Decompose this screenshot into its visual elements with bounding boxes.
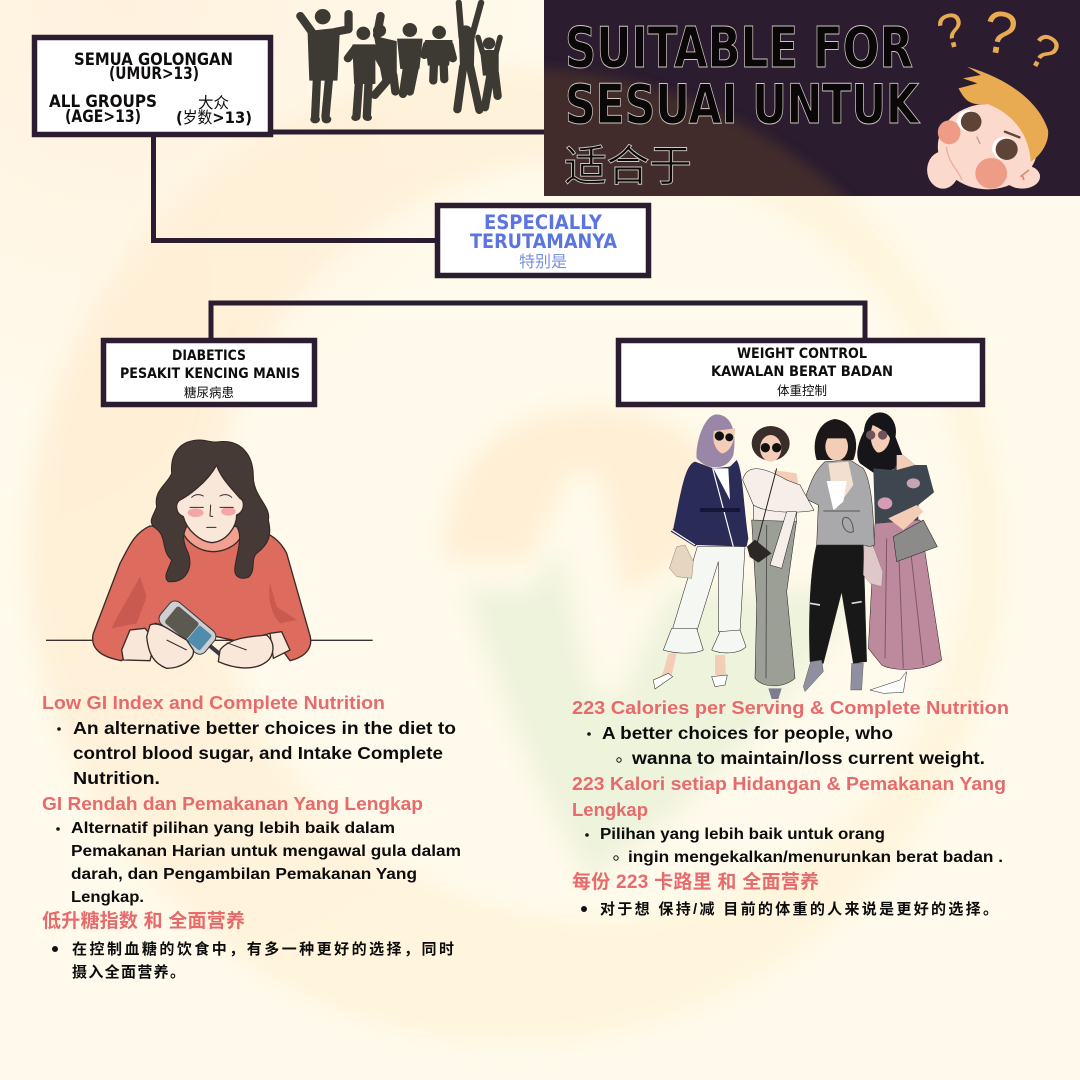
bullet: english: control blood sugar, and Intake Complete	[73, 743, 443, 763]
label: pesakit kencing manis: PESAKIT KENCING MANIS	[120, 366, 300, 382]
heading: chinese low gi: 低升糖指数 和 全面营养	[42, 909, 245, 932]
title: suitable for: SUITABLE FOR	[565, 16, 913, 81]
label: terutamanya: TERUTAMANYA	[470, 230, 617, 253]
figure: woman in hijab	[653, 414, 748, 689]
heading: kalori: 223 Kalori setiap Hidangan & Pemakanan Yang	[572, 774, 1006, 794]
bullet: chinese: 摄入全面营养。	[72, 963, 185, 981]
figure: woman in skirt	[857, 412, 942, 693]
label: chinese diabetics: 糖尿病患	[184, 385, 234, 400]
bullet: chinese: 对于想 保持/减 目前的体重的人来说是更好的选择。	[600, 900, 998, 918]
bullet: english: wanna to maintain/loss current weight.	[631, 748, 985, 768]
panel: especially box	[438, 206, 648, 276]
icon: confused pig face	[927, 67, 1048, 189]
text block: diabetic benefits	[42, 693, 461, 981]
illustration: four women	[653, 412, 942, 699]
bullet: malay: Pemakanan Harian untuk mengawal gula dalam	[71, 843, 461, 860]
icon: jumping people silhouettes	[300, 3, 500, 123]
bullet: chinese: 在控制血糖的饮食中，有多一种更好的选择，同时	[72, 940, 454, 958]
label: umur: (UMUR>13)	[109, 64, 199, 83]
label: chinese weight control: 体重控制	[777, 383, 827, 398]
heading: chinese calories: 每份 223 卡路里 和 全面营养	[572, 870, 819, 893]
label: chinese age: (岁数>13)	[176, 108, 252, 127]
bullet: malay: darah, dan Pengambilan Pemakanan Yang	[71, 866, 417, 883]
label: chinese general public: 大众	[198, 94, 229, 112]
label: chinese especially: 特别是	[519, 253, 567, 271]
bullet: english: Nutrition.	[73, 768, 160, 788]
heading: gi rendah: GI Rendah dan Pemakanan Yang Lengkap	[42, 794, 423, 814]
icon: question marks	[932, 0, 1068, 82]
label: diabetics: DIABETICS	[172, 348, 246, 364]
bullet: english: An alternative better choices in the diet to	[73, 718, 456, 738]
figure: woman in grey cardigan	[803, 419, 883, 692]
bullet: english	[57, 718, 456, 788]
panel: title banner	[544, 0, 1080, 196]
bullet: malay: ingin mengekalkan/menurunkan berat badan .	[628, 849, 1003, 866]
bullet: chinese	[52, 940, 454, 981]
illustration: woman checking blood sugar	[46, 440, 373, 668]
label: age: (AGE>13)	[65, 107, 141, 126]
connector lines	[154, 132, 865, 338]
heading: calories: 223 Calories per Serving & Complete Nutrition	[572, 698, 1009, 718]
label: especially: ESPECIALLY	[484, 211, 603, 234]
title: chinese: 适合于	[564, 143, 692, 191]
panel: diabetics box	[104, 340, 314, 404]
icon: question marks: ?	[1019, 22, 1068, 82]
panel: weight control box	[618, 340, 982, 404]
panel: all groups box	[34, 38, 270, 134]
bullet: english: A better choices for people, who	[602, 723, 893, 743]
title: sesuai untuk: SESUAI UNTUK	[565, 73, 921, 136]
bullet: malay: Pilihan yang lebih baik untuk orang	[600, 826, 885, 843]
heading: lengkap: Lengkap	[572, 800, 648, 820]
bullet: malay	[585, 826, 1003, 866]
label: kawalan berat badan: KAWALAN BERAT BADAN	[711, 364, 893, 380]
text block: weight control benefits	[572, 698, 1009, 918]
bullet: english	[587, 723, 985, 768]
bullet: malay	[56, 820, 461, 906]
label: semua golongan: SEMUA GOLONGAN	[74, 50, 233, 69]
label: weight control: WEIGHT CONTROL	[737, 346, 867, 362]
label: all groups: ALL GROUPS	[49, 92, 157, 111]
bullet: malay: Lengkap.	[71, 889, 144, 906]
heading: low gi: Low GI Index and Complete Nutrition	[42, 693, 385, 713]
bullet: malay: Alternatif pilihan yang lebih baik dalam	[71, 820, 395, 837]
icon: question marks: ?	[932, 2, 971, 61]
figure: woman in wide grey pants	[743, 426, 814, 699]
